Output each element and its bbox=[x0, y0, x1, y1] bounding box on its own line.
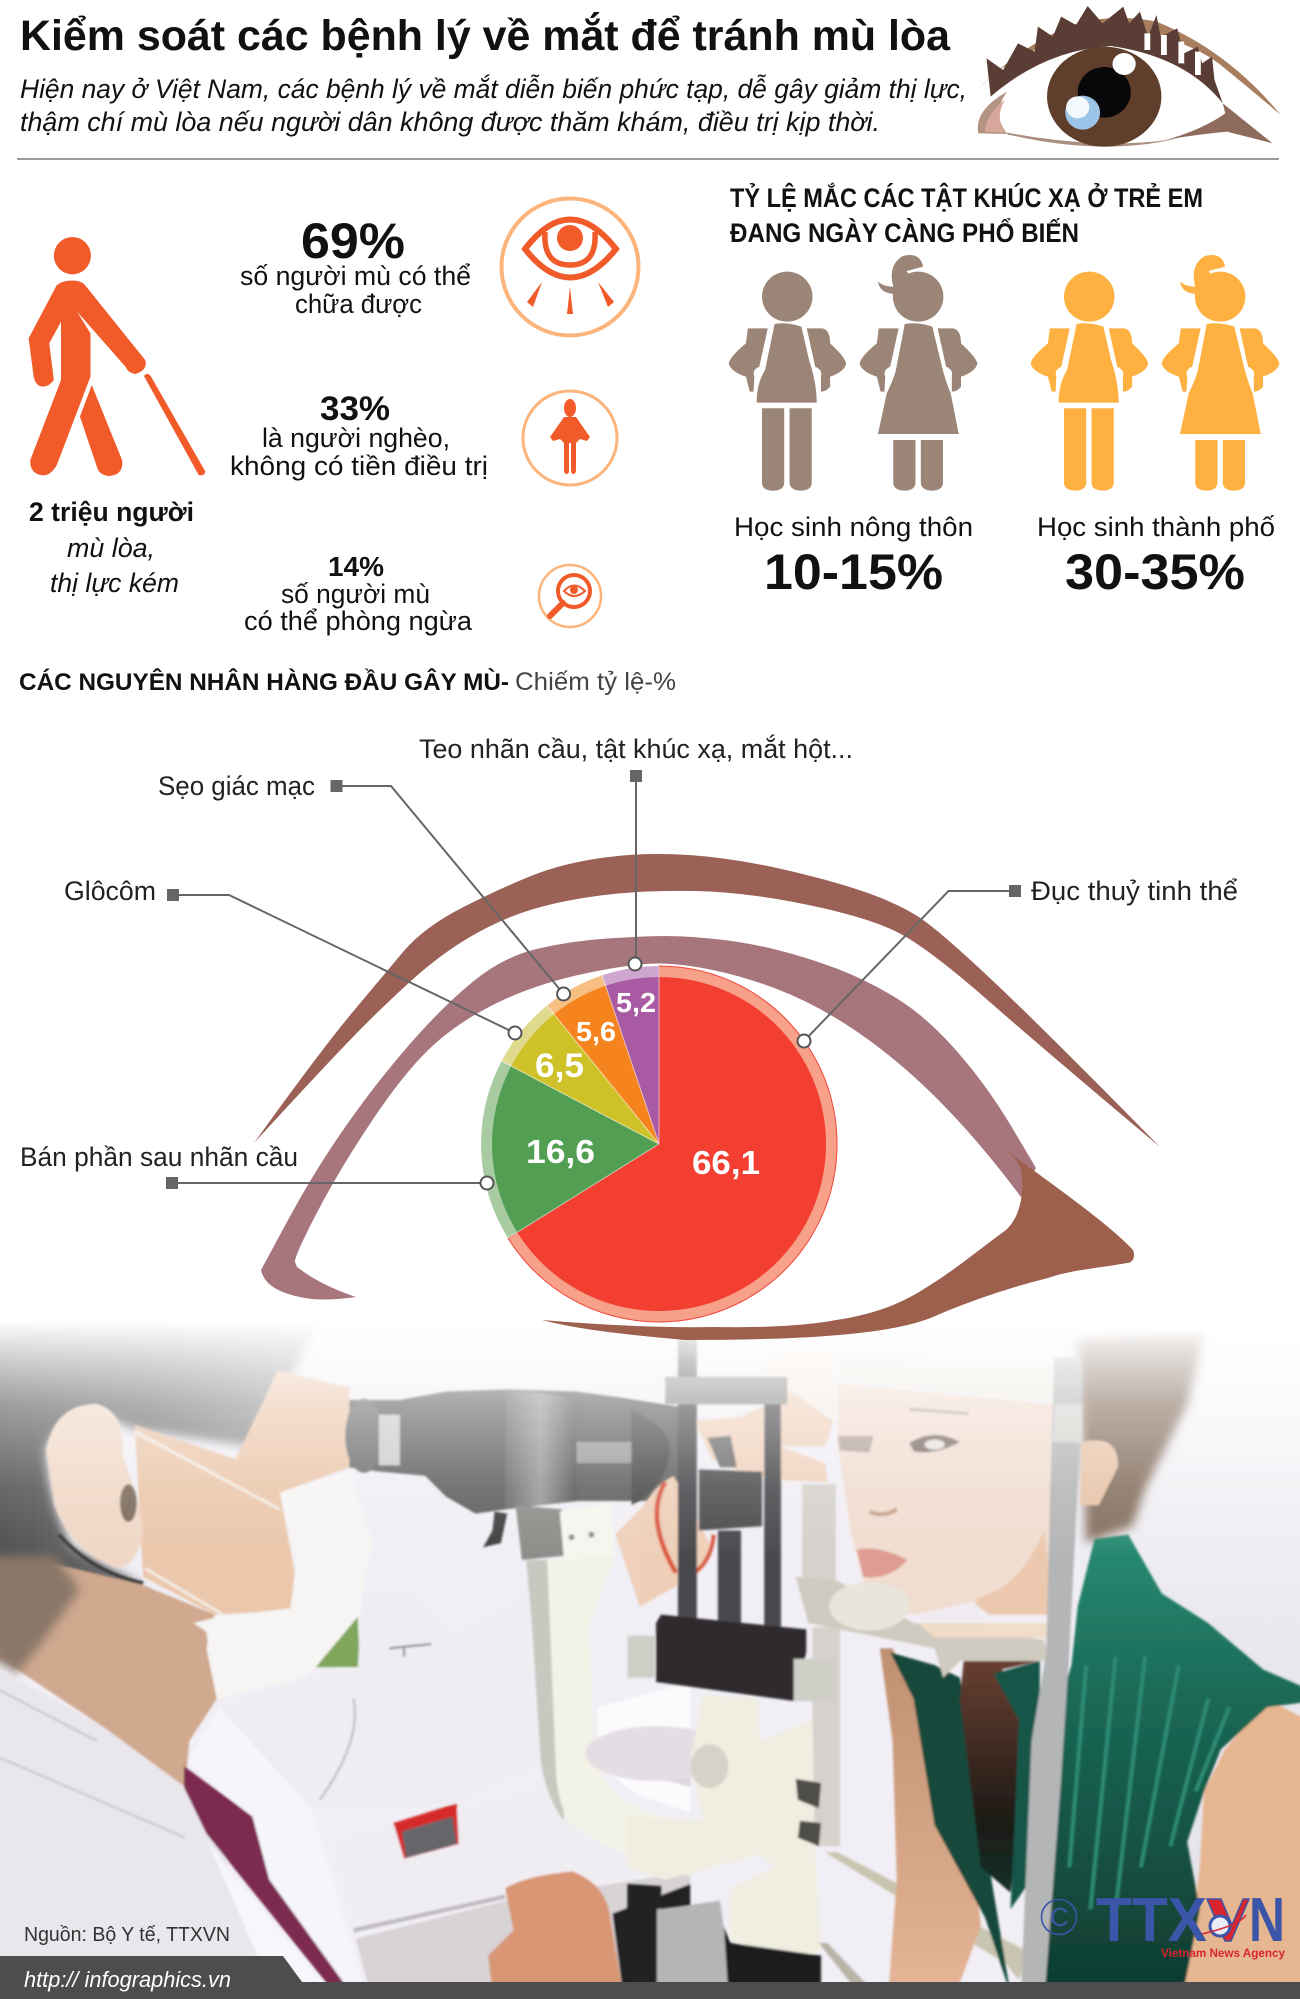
leader lines bbox=[172, 776, 1015, 1183]
lens end bbox=[632, 1410, 670, 1505]
eye outline: upper lid bbox=[261, 936, 1036, 1300]
logo: TTXVN bbox=[1042, 1886, 1285, 1960]
patient ear bbox=[1080, 1440, 1118, 1505]
label: city bbox=[1037, 512, 1275, 600]
pie values: 66,1 bbox=[692, 1144, 760, 1181]
intro text bbox=[20, 73, 967, 137]
patient green top bbox=[890, 1535, 1300, 1993]
website text: http:// infographics.vn bbox=[24, 1967, 231, 1992]
label: city: Học sinh thành phố bbox=[1037, 512, 1275, 542]
stat: 33%: là người nghèo, bbox=[262, 423, 450, 453]
stat: 33%: 33% bbox=[320, 390, 390, 428]
logo: TTXVN: N bbox=[1249, 1886, 1285, 1955]
red box bbox=[394, 1803, 459, 1859]
chin rest bbox=[796, 1577, 1050, 1678]
pie values: 5,2 bbox=[616, 987, 656, 1018]
label: glaucoma: Glôcôm bbox=[64, 876, 156, 906]
divider bbox=[17, 158, 1279, 160]
patient arms bbox=[880, 1648, 981, 1993]
column behind bbox=[802, 1484, 840, 1846]
logo: TTXVN: TTX bbox=[1096, 1886, 1207, 1955]
label: cataract: Đục thuỷ tinh thể bbox=[1031, 876, 1238, 906]
photo top fade bbox=[0, 1320, 1213, 1539]
cream arm bbox=[526, 1558, 690, 1876]
icon: rural students bbox=[729, 255, 977, 491]
text: 2 million people: thị lực kém bbox=[50, 568, 179, 598]
table and floor bbox=[392, 1808, 593, 1896]
pole bbox=[1021, 1358, 1082, 1993]
doctor upper hand bbox=[614, 1496, 676, 1606]
slit-lamp black block bbox=[656, 1615, 806, 1701]
label: posterior segment: Bán phần sau nhãn cầu bbox=[20, 1142, 298, 1172]
stat: 14% bbox=[244, 551, 473, 636]
eye outline: eyebrow bbox=[254, 854, 1160, 1147]
pie chart: causes of blindness bbox=[481, 966, 837, 1322]
doctor side of photo bbox=[0, 1320, 690, 1993]
knobs bbox=[627, 1636, 836, 1701]
label: rural bbox=[734, 512, 973, 600]
title: Kiểm soát các bệnh lý về mắt để tránh mù lòa bbox=[20, 11, 951, 60]
mask bbox=[134, 1430, 360, 1669]
photo: doctor examining patient bbox=[0, 1320, 1300, 1999]
stat: 69%: chữa được bbox=[295, 289, 422, 319]
diagonal bar bbox=[825, 1852, 1027, 1980]
pie values: 5,6 bbox=[576, 1016, 616, 1047]
doctor hair bbox=[0, 1320, 320, 1657]
icon: magnifier eye bbox=[539, 565, 601, 627]
doctor ear bbox=[46, 1404, 143, 1583]
stat: 33%: không có tiền điều trị bbox=[230, 451, 488, 481]
slice: glaucoma 6.5 bbox=[502, 1006, 659, 1144]
text: 2 million people: mù lòa, bbox=[67, 533, 155, 563]
hand and bracelet bbox=[640, 1384, 835, 1606]
heading: leading causes: Chiếm tỷ lệ-% bbox=[515, 668, 676, 696]
pie values: 6,5 bbox=[535, 1047, 584, 1085]
icon: eye with rays bbox=[502, 198, 638, 336]
forehead strap bbox=[1022, 1396, 1050, 1400]
slit-lamp mount plate bbox=[514, 1505, 596, 1561]
label: rural: Học sinh nông thôn bbox=[734, 512, 973, 542]
heading: refractive error bbox=[730, 181, 1203, 248]
icon: city students bbox=[1031, 255, 1279, 491]
doctor face bbox=[135, 1371, 349, 1615]
stat: 14%: có thể phòng ngừa bbox=[244, 606, 473, 636]
patient face bbox=[838, 1383, 1055, 1615]
logo: TTXVN: Vietnam News Agency bbox=[1161, 1946, 1285, 1960]
logo: TTXVN: C bbox=[1050, 1902, 1069, 1932]
stat: 69%: số người mù có thể bbox=[240, 261, 471, 291]
slice: posterior 16.6 bbox=[481, 1061, 659, 1238]
icon: header eye bbox=[977, 6, 1281, 147]
label: city: 30-35% bbox=[1065, 544, 1245, 600]
slice: corneal scar 5.6 bbox=[547, 975, 659, 1144]
intro text: thậm chí mù lòa nếu người dân không được thăm khám, điều trị kịp thời. bbox=[20, 107, 880, 137]
doctor lower hand bbox=[488, 1871, 623, 1993]
heading: refractive error: TỶ LỆ MẮC CÁC TẬT KHÚC XẠ Ở TRẺ EM bbox=[730, 181, 1203, 213]
slit-lamp lens bbox=[345, 1389, 690, 1547]
bowl bbox=[598, 1682, 690, 1812]
doctor neck bbox=[0, 1564, 217, 1787]
slice: cataract 66.1 bbox=[508, 966, 837, 1322]
text: 2 million people: 2 triệu người bbox=[29, 497, 194, 527]
label: corneal scar: Sẹo giác mạc bbox=[158, 771, 315, 801]
heading: refractive error: ĐANG NGÀY CÀNG PHỔ BIẾN bbox=[730, 217, 1079, 248]
heading: leading causes: CÁC NGUYÊN NHÂN HÀNG ĐẦU GÂY MÙ- bbox=[19, 668, 509, 696]
doctor coat and tie bbox=[0, 1678, 344, 1982]
icon: blind person with cane bbox=[29, 237, 205, 476]
machine base bbox=[627, 1884, 821, 1993]
slit-lamp rods bbox=[665, 1337, 787, 1631]
patient side of photo bbox=[585, 1333, 1300, 1993]
bottom bar bbox=[0, 1956, 1300, 1999]
patient hair bbox=[1078, 1333, 1204, 1543]
eye outline: corner and lower lid bbox=[542, 1148, 1134, 1340]
stat: 69% bbox=[240, 213, 471, 319]
bowl and cream body bbox=[585, 1695, 821, 1956]
doctor sleeve bbox=[219, 1589, 539, 1808]
label: rural: 10-15% bbox=[764, 544, 943, 600]
stat: 69%: 69% bbox=[301, 213, 405, 269]
text: 2 million people bbox=[29, 497, 194, 598]
pie values: 16,6 bbox=[526, 1133, 595, 1170]
intro text: Hiện nay ở Việt Nam, các bệnh lý về mắt diễn biến phức tạp, dễ gây giảm thị lực, bbox=[20, 73, 967, 104]
label: other causes: Teo nhãn cầu, tật khúc xạ, mắt hột... bbox=[419, 733, 853, 764]
stat: 14%: số người mù bbox=[281, 579, 430, 609]
stat: 14%: 14% bbox=[328, 551, 384, 582]
stat: 33% bbox=[230, 390, 488, 481]
leader markers bbox=[166, 770, 1021, 1190]
pie values bbox=[526, 987, 760, 1181]
icon: poor person with empty pockets bbox=[523, 391, 617, 485]
slice: other 5.2 bbox=[602, 966, 659, 1144]
source: Nguồn: Bộ Y tế, TTXVN bbox=[24, 1924, 230, 1946]
